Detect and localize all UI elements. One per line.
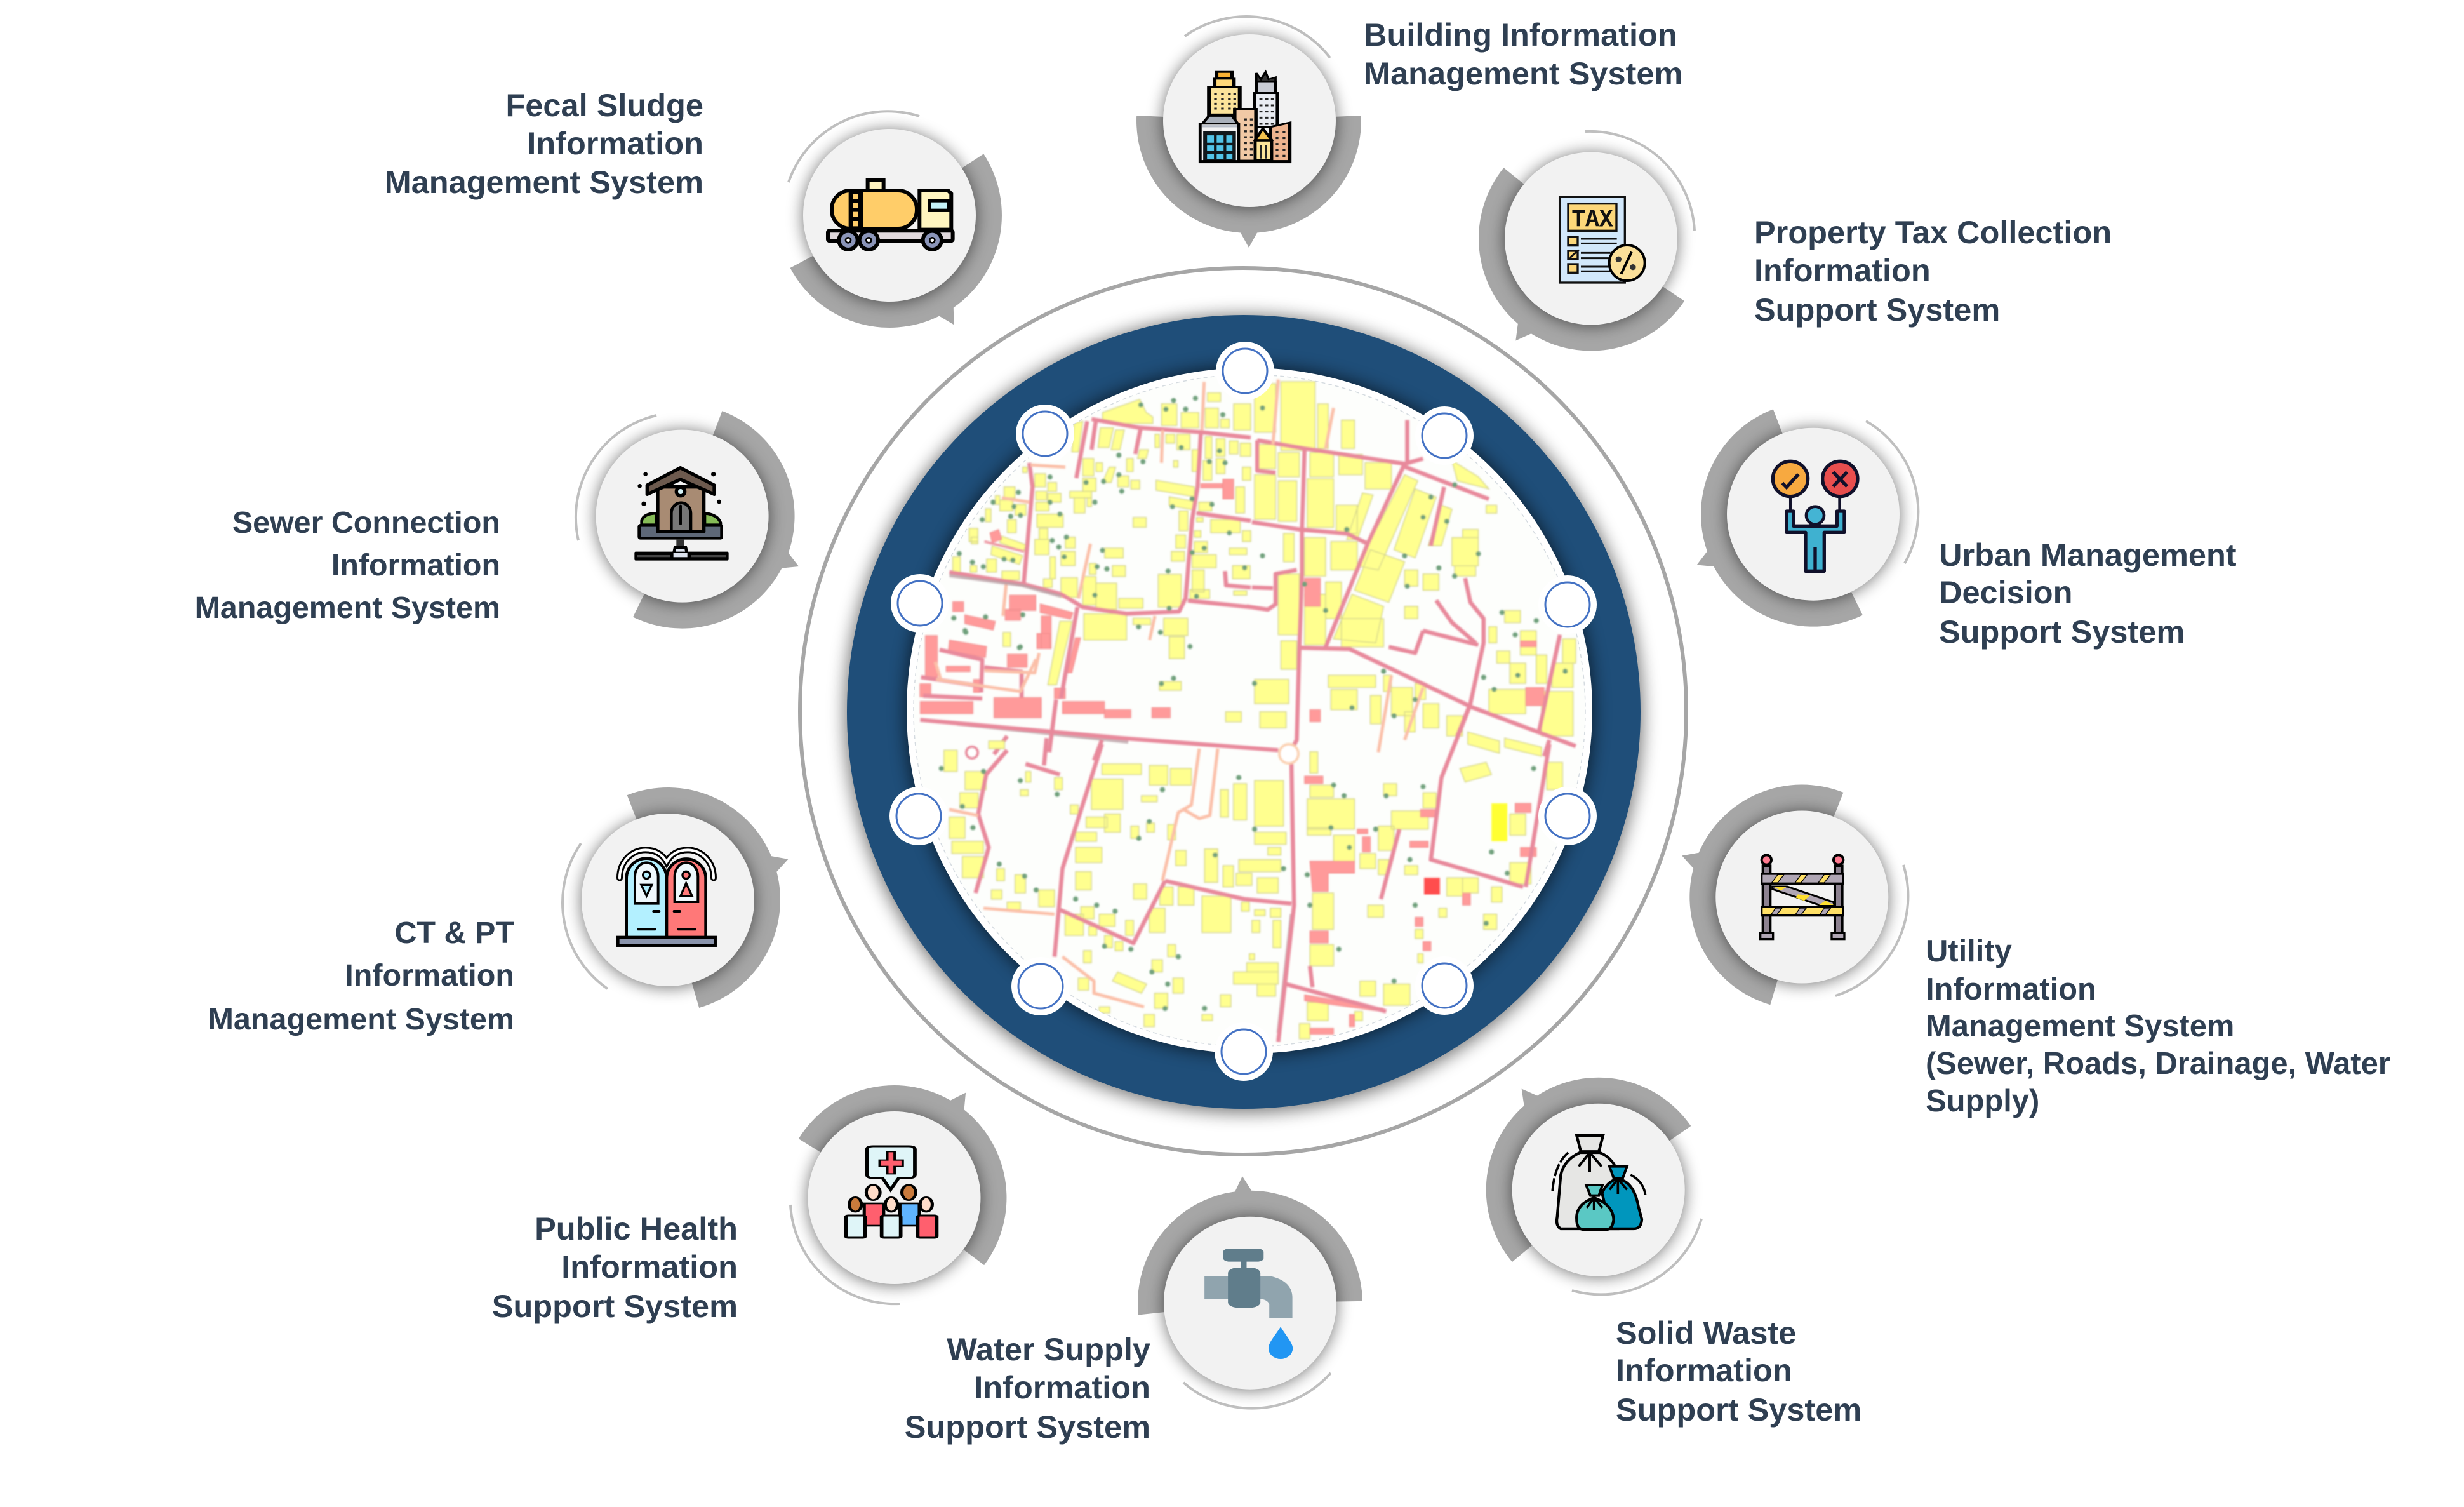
icon: garbage bags bbox=[1552, 1135, 1646, 1229]
satellite: sewer connection bbox=[576, 411, 843, 669]
outer thin ring bbox=[800, 268, 1686, 1155]
icon: person with decision signs bbox=[1773, 461, 1858, 571]
satellite: solid waste bbox=[1432, 1021, 1701, 1294]
icon: tax form bbox=[1560, 197, 1645, 283]
label: property tax: Support System bbox=[1754, 291, 2000, 328]
label: water supply: Water Supply bbox=[947, 1331, 1150, 1367]
label: CT and PT: Management System bbox=[208, 1002, 514, 1036]
label: public health: Support System bbox=[492, 1288, 738, 1324]
satellite: water supply bbox=[1130, 1169, 1362, 1409]
label: public health: Public Health bbox=[535, 1210, 738, 1247]
label: building information: Building Information bbox=[1364, 17, 1677, 53]
label: utility: Supply) bbox=[1926, 1084, 2039, 1118]
icon: city buildings bbox=[1199, 72, 1291, 163]
label: property tax: Property Tax Collection bbox=[1754, 214, 2112, 250]
label: solid waste: Solid Waste bbox=[1616, 1315, 1796, 1351]
label: water supply: Information bbox=[974, 1369, 1150, 1405]
label: sewer connection: Sewer Connection bbox=[232, 506, 500, 540]
label: sewer connection: Management System bbox=[195, 591, 500, 625]
label: water supply: Support System bbox=[905, 1409, 1150, 1445]
satellite: public health bbox=[790, 1029, 1058, 1304]
satellite: fecal sludge bbox=[789, 111, 1051, 382]
icon: water tap bbox=[1204, 1249, 1293, 1359]
label: public health: Information bbox=[561, 1249, 738, 1285]
label: CT and PT: CT & PT bbox=[394, 916, 514, 950]
icon: public toilets bbox=[618, 850, 716, 946]
label: urban management: Urban Management bbox=[1939, 537, 2237, 573]
satellite: property tax bbox=[1425, 131, 1695, 408]
map nodes bbox=[889, 342, 1597, 1081]
icon: road barrier bbox=[1761, 855, 1844, 939]
label: fecal sludge: Information bbox=[527, 125, 703, 161]
label: solid waste: Information bbox=[1616, 1352, 1792, 1388]
label: fecal sludge: Fecal Sludge bbox=[505, 87, 703, 123]
satellite: urban management bbox=[1652, 409, 1918, 668]
label: urban management: Support System bbox=[1939, 613, 2185, 650]
label: utility: (Sewer, Roads, Drainage, Water bbox=[1926, 1047, 2390, 1081]
label: sewer connection: Information bbox=[331, 548, 500, 582]
icon: people with medical cross bbox=[846, 1146, 936, 1238]
satellite: building information bbox=[1136, 17, 1361, 248]
central street map bbox=[907, 368, 1592, 1054]
icon: tanker truck bbox=[828, 180, 953, 250]
label: urban management: Decision bbox=[1939, 574, 2072, 610]
label: utility: Utility bbox=[1926, 934, 2012, 968]
icon: tax form: TAX bbox=[1571, 206, 1613, 234]
label: property tax: Information bbox=[1754, 252, 1931, 288]
central blue disc bbox=[845, 315, 1642, 1113]
satellite: utility bbox=[1646, 749, 1908, 1005]
label: CT and PT: Information bbox=[345, 958, 514, 993]
label: utility: Management System bbox=[1926, 1009, 2234, 1043]
label: building information: Management System bbox=[1364, 55, 1682, 91]
icon: house with sewer pipe bbox=[634, 468, 729, 561]
satellite: CT and PT bbox=[563, 753, 824, 1008]
label: solid waste: Support System bbox=[1616, 1391, 1861, 1428]
label: fecal sludge: Management System bbox=[385, 164, 703, 200]
label: utility: Information bbox=[1926, 972, 2096, 1007]
